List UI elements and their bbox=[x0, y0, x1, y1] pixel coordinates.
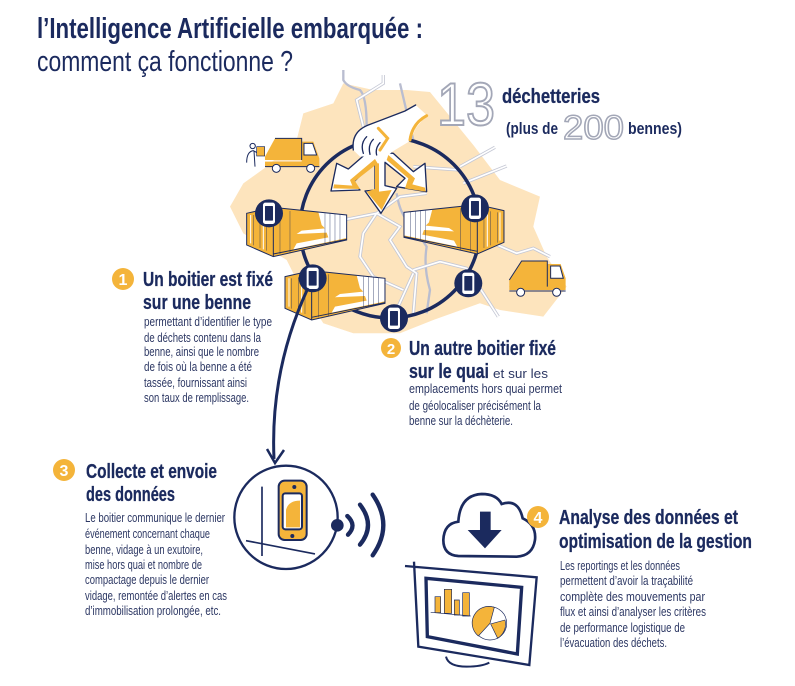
icon: collection truck with worker bbox=[247, 138, 319, 172]
step 1 heading: sur une benne bbox=[143, 292, 251, 314]
container: top right bbox=[404, 205, 504, 254]
step 4 heading: Analyse des données et bbox=[559, 507, 738, 529]
step 3 heading bbox=[86, 461, 217, 506]
step 4 number bbox=[527, 506, 549, 528]
step 2 heading: Un autre boitier fixé bbox=[409, 338, 556, 360]
hand with arrows bbox=[331, 105, 427, 213]
step 4 text: l’évacuation des déchets. bbox=[560, 635, 667, 650]
number 13: 13 bbox=[437, 71, 495, 138]
step 3 text: événement concernant chaque bbox=[85, 526, 210, 541]
step 3 bbox=[53, 459, 227, 618]
step 4 text bbox=[560, 558, 706, 650]
connector line to detail circle bbox=[267, 288, 308, 463]
step 4 bbox=[559, 507, 752, 650]
title: l’Intelligence Artificielle embarquée : bbox=[37, 13, 423, 45]
step 1 text: benne, ainsi que le nombre bbox=[144, 344, 259, 359]
label: plus de 200 bennes bbox=[506, 109, 682, 147]
step 2 text bbox=[409, 366, 562, 428]
step 2 heading: sur le quai bbox=[409, 361, 489, 383]
central circle bbox=[300, 138, 480, 318]
container: bottom left bbox=[285, 271, 385, 320]
step 4 heading bbox=[559, 507, 752, 553]
step 2 heading bbox=[409, 338, 556, 383]
step 3 number: 3 bbox=[60, 463, 69, 480]
step 2 number: 2 bbox=[387, 341, 395, 358]
step 3 text: mise hors quai et nombre de bbox=[85, 557, 202, 572]
step 4 text: permettent d’avoir la traçabilité bbox=[560, 573, 693, 588]
step 2 text: de géolocaliser précisément la bbox=[409, 398, 542, 413]
step 4 text: de performance logistique de bbox=[560, 620, 685, 635]
step 1 heading bbox=[143, 269, 273, 314]
step 4 text: Les reportings et les données bbox=[560, 558, 680, 573]
step 2 text: benne sur la déchèterie. bbox=[409, 413, 513, 428]
label: plus de 200 bennes: 200 bbox=[563, 109, 624, 147]
step 3 text: Le boitier communique le dernier bbox=[85, 510, 225, 525]
step 1 bbox=[112, 268, 273, 405]
container: top left bbox=[247, 207, 347, 257]
step 3 text: benne, vidage à un exutoire, bbox=[85, 542, 203, 557]
step 1 text: tassée, fournissant ainsi bbox=[144, 375, 247, 390]
step 3 text bbox=[85, 510, 227, 618]
step 3 heading: des données bbox=[86, 484, 175, 506]
icon: monitor with charts bbox=[405, 562, 537, 667]
step 2 text: et sur les bbox=[493, 366, 549, 381]
step 1 number bbox=[112, 268, 134, 290]
step 1 heading: Un boitier est fixé bbox=[143, 269, 273, 291]
title: comment ça fonctionne ? bbox=[37, 46, 293, 78]
step 4 number: 4 bbox=[534, 510, 543, 527]
title bbox=[37, 13, 423, 78]
label: plus de 200 bennes: bennes) bbox=[628, 119, 682, 138]
icon: tracker detail circle with signal waves bbox=[234, 466, 383, 569]
step 1 number: 1 bbox=[119, 272, 128, 289]
step 4 text: flux et ainsi d’analyser les critères bbox=[560, 604, 706, 619]
step 3 text: vidage, remontée d’alertes en cas bbox=[85, 588, 227, 603]
icon: truck right bbox=[509, 261, 566, 296]
step 1 text bbox=[144, 314, 272, 405]
step 2 bbox=[381, 338, 562, 428]
step 2 text: emplacements hors quai permet bbox=[409, 381, 562, 396]
step 1 text: de fois où la benne a été bbox=[144, 359, 252, 374]
step 2 number bbox=[381, 338, 401, 358]
containers on the circle bbox=[247, 205, 504, 320]
label: plus de 200 bennes: (plus de bbox=[506, 119, 558, 138]
label: déchetteries: déchetteries bbox=[502, 86, 600, 108]
map of the territory bbox=[230, 70, 567, 333]
step 3 number bbox=[53, 459, 75, 481]
step 4 text: complète des mouvements par bbox=[560, 589, 706, 604]
step 1 text: permettant d’identifier le type bbox=[144, 314, 272, 329]
step 3 heading: Collecte et envoie bbox=[86, 461, 217, 483]
step 1 text: de déchets contenu dans la bbox=[144, 330, 262, 345]
step 3 text: d’immobilisation prolongée, etc. bbox=[85, 603, 221, 618]
tracker badges bbox=[255, 194, 489, 332]
step 1 text: son taux de remplissage. bbox=[144, 390, 249, 405]
step 3 text: compactage depuis le dernier bbox=[85, 572, 209, 587]
icon: cloud download bbox=[443, 494, 535, 557]
